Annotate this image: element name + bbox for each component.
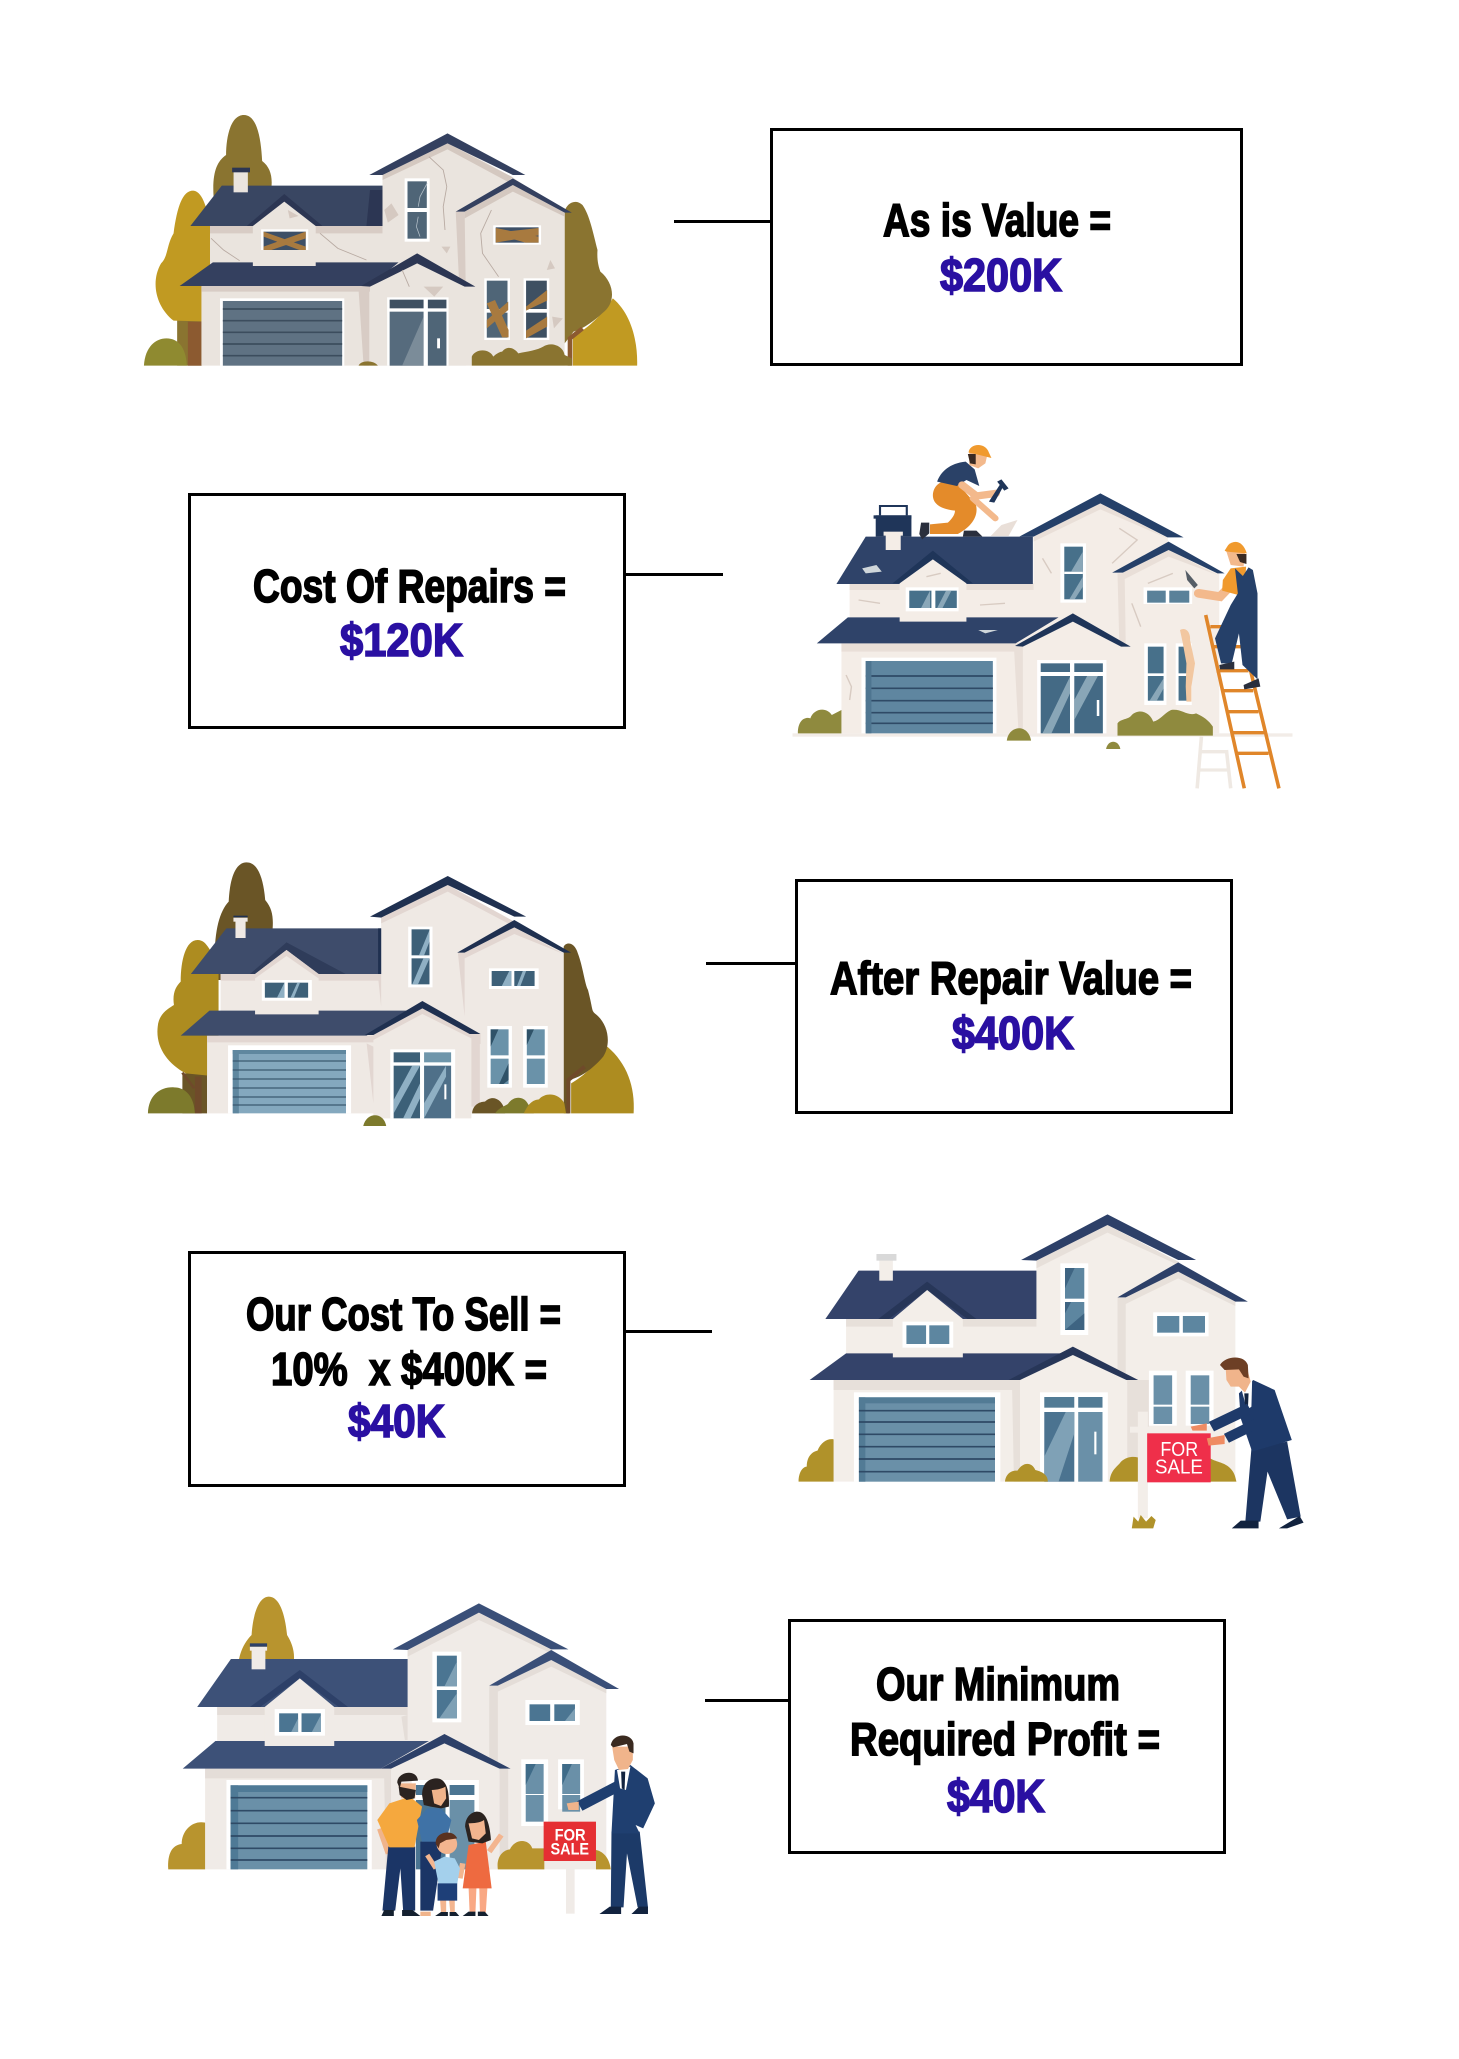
garage door [220, 298, 344, 366]
illustration: repaired house [148, 862, 634, 1126]
chimney [233, 916, 248, 938]
connector line 4 [625, 1330, 712, 1333]
shrubs [359, 344, 572, 366]
dormer window [906, 587, 959, 611]
label line 2: 10% x $400K = [271, 1343, 547, 1395]
for sale sign: FOR [1160, 1439, 1198, 1461]
upper window [525, 1700, 580, 1725]
label: As is Value = [883, 194, 1111, 246]
value: $200K [940, 249, 1062, 301]
illustration: house under repair with workers [792, 445, 1292, 788]
boarded dormer window [261, 229, 308, 253]
value: $400K [952, 1007, 1074, 1059]
label: Cost Of Repairs = [253, 560, 566, 612]
boarded side windows [484, 278, 549, 340]
shrubs [168, 1822, 611, 1869]
wall cracks and patches [211, 157, 563, 328]
front door [1040, 1392, 1108, 1482]
connector line 5 [705, 1699, 789, 1702]
side windows [1144, 643, 1192, 705]
for sale sign [544, 1822, 596, 1914]
worker on ladder [1185, 542, 1260, 689]
connector line 1 [674, 220, 771, 223]
for sale sign: SALE [551, 1840, 589, 1859]
tower window [1060, 543, 1086, 603]
panel: after repair value [796, 880, 1232, 1112]
shrubs [798, 710, 1213, 749]
connector line 2 [625, 573, 723, 576]
real estate agent [567, 1736, 655, 1914]
illustration: distressed house, as-is [144, 115, 637, 366]
front door [412, 1780, 479, 1869]
garage door [861, 658, 996, 733]
chimney [876, 1254, 896, 1281]
panel: as-is value [772, 130, 1242, 364]
tower window [408, 927, 433, 987]
tower window [432, 1652, 461, 1722]
garage door [226, 1780, 372, 1869]
illustration: house for sale with agent [799, 1214, 1304, 1528]
boarded upper window [493, 225, 541, 245]
girl [460, 1812, 501, 1916]
label line 2: Required Profit = [850, 1713, 1160, 1765]
front door [1037, 660, 1106, 733]
garage door [854, 1392, 1000, 1482]
upper window [1144, 587, 1192, 604]
label line 1: Our Cost To Sell = [246, 1288, 561, 1340]
value: $120K [340, 614, 463, 666]
shrubs [363, 1095, 566, 1126]
ladder [1197, 615, 1279, 788]
panel: cost of repairs [190, 494, 624, 728]
upper window [489, 968, 539, 989]
garage door [228, 1045, 351, 1113]
wall cracks [846, 528, 1173, 700]
illustration: family, agent and house sold [168, 1597, 655, 1916]
label: After Repair Value = [830, 952, 1192, 1004]
father [377, 1773, 422, 1916]
side windows [487, 1026, 548, 1088]
exposed wall patch [1180, 629, 1195, 702]
front door [387, 297, 449, 366]
tower window [1060, 1263, 1088, 1335]
for sale sign: FOR [555, 1826, 586, 1845]
toolbox [874, 506, 911, 537]
upper window [1153, 1312, 1209, 1336]
shrubs [799, 1439, 1236, 1482]
chimney [884, 532, 903, 550]
for sale sign [1130, 1412, 1211, 1528]
value: $40K [947, 1770, 1045, 1822]
front door [390, 1049, 455, 1118]
tower window with cracks [405, 178, 430, 242]
dormer window [275, 1709, 325, 1736]
side windows [521, 1759, 584, 1826]
chimney [250, 1643, 267, 1669]
panel: minimum required profit [790, 1620, 1224, 1852]
for sale sign: SALE [1155, 1456, 1203, 1478]
chimney [232, 168, 250, 192]
connector line 3 [706, 962, 796, 965]
dormer window [902, 1322, 953, 1348]
panel: our cost to sell [190, 1252, 624, 1486]
label line 1: Our Minimum [876, 1658, 1120, 1710]
worker on roof [919, 445, 1018, 539]
value: $40K [348, 1395, 445, 1447]
side windows [1149, 1371, 1214, 1426]
boy [427, 1832, 460, 1916]
family [377, 1773, 501, 1916]
dormer window [262, 980, 312, 1001]
real estate agent [1191, 1357, 1304, 1528]
mother [417, 1778, 451, 1916]
